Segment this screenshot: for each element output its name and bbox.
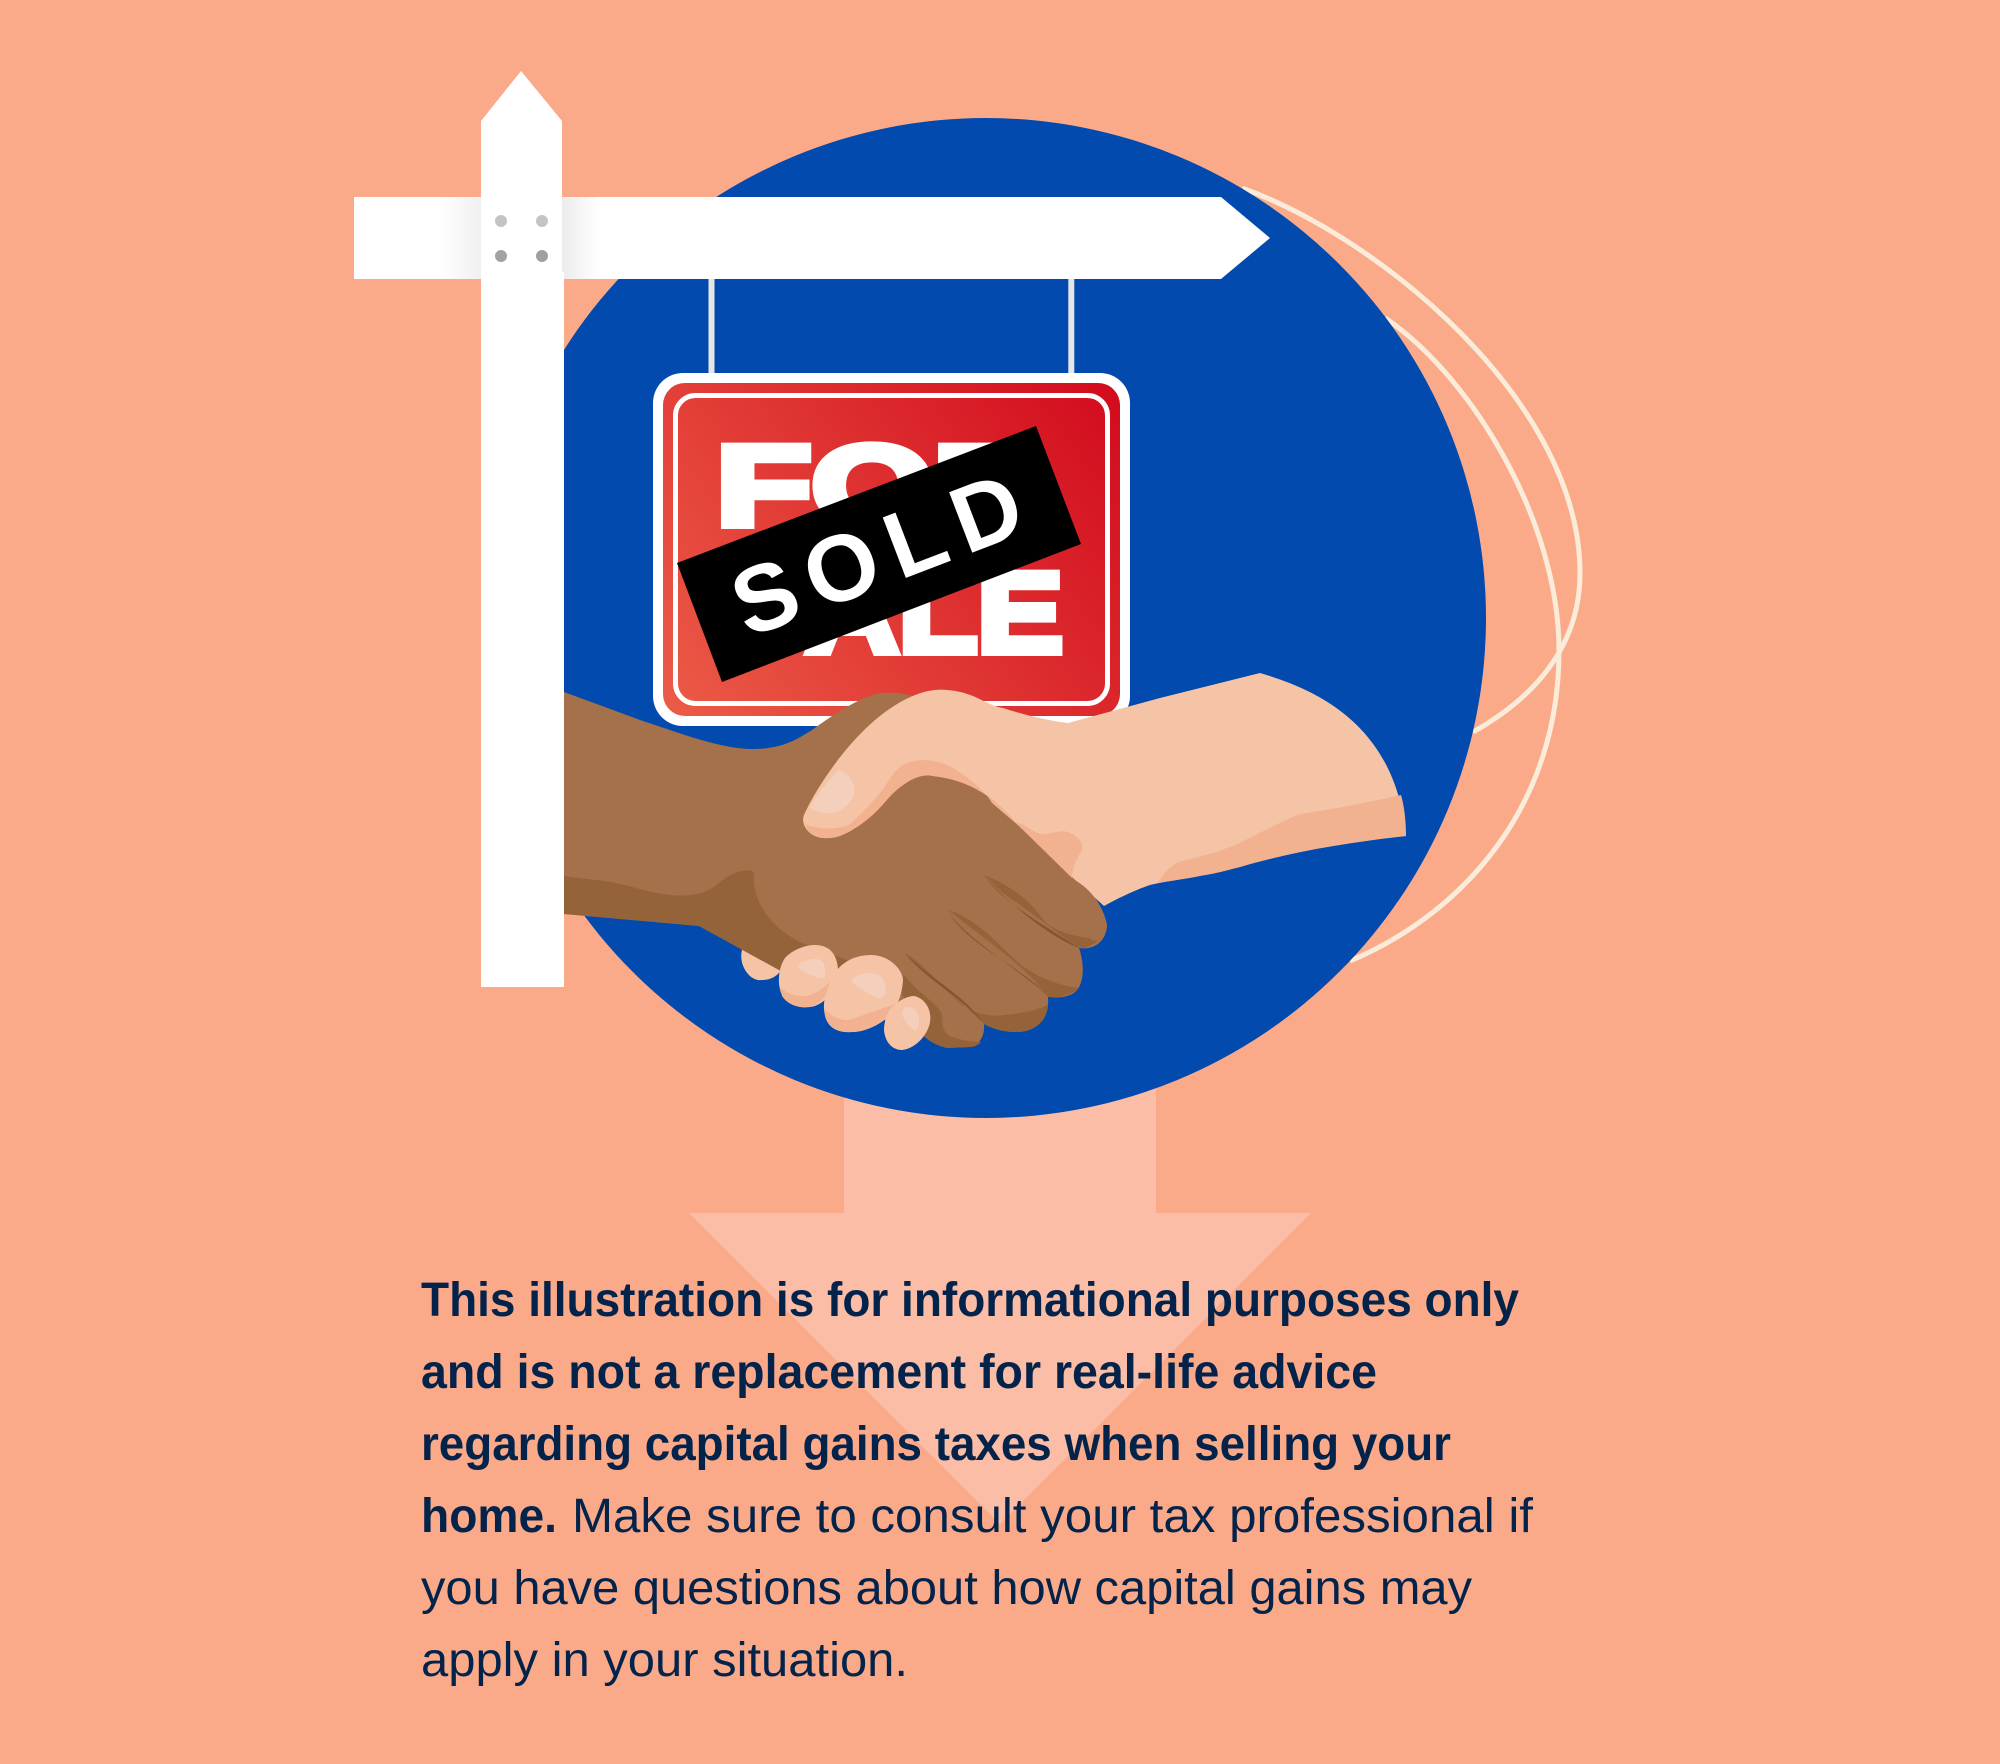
brown hand and arm — [564, 692, 1107, 1048]
back light finger — [741, 950, 782, 980]
arrow: pale down arrow behind the text — [689, 1050, 1311, 1524]
disclaimer text block — [421, 1274, 1534, 1687]
brown finger lobe over the light wrist — [1040, 856, 1107, 940]
sign post arm — [354, 197, 1270, 279]
blue circle — [486, 118, 1486, 1118]
regular body: apply in your situation. — [421, 1634, 908, 1687]
light fingertips — [779, 945, 930, 1050]
sold banner — [677, 426, 1081, 682]
arm shadow — [1158, 795, 1406, 883]
brown arm shading — [564, 870, 860, 1000]
finger shading — [984, 875, 1099, 948]
sign text: FOR: FOR — [716, 423, 1046, 550]
wrist shadow — [1015, 822, 1082, 878]
fingertip three — [884, 996, 930, 1050]
bold lead-in: This illustration is for informational purposes only — [421, 1274, 1519, 1327]
sign post upright — [481, 71, 564, 987]
handshake illustration — [564, 673, 1406, 1050]
bold lead-in: home. — [421, 1490, 557, 1543]
regular body — [421, 1490, 1534, 1687]
regular body: you have questions about how capital gains may — [421, 1562, 1472, 1615]
finger creases — [984, 875, 1079, 948]
fingertip two — [824, 955, 903, 1032]
fingertip one — [779, 945, 838, 1007]
sign text: SALE: SALE — [720, 550, 1063, 677]
light hand and arm — [803, 673, 1406, 906]
regular body: Make sure to consult your tax professional if — [572, 1490, 1534, 1543]
bold lead-in: regarding capital gains taxes when selling your — [421, 1418, 1451, 1471]
sold banner: SOLD — [717, 451, 1037, 657]
sign hangers — [708, 279, 1074, 375]
bold lead-in: and is not a replacement for real-life advice — [421, 1346, 1377, 1399]
thumb highlight — [810, 770, 854, 813]
for sale sign — [653, 373, 1130, 726]
thumb shadow — [805, 760, 1020, 838]
bold lead-in — [421, 1274, 1519, 1543]
decorative cream rings behind the circle — [1242, 188, 1580, 961]
